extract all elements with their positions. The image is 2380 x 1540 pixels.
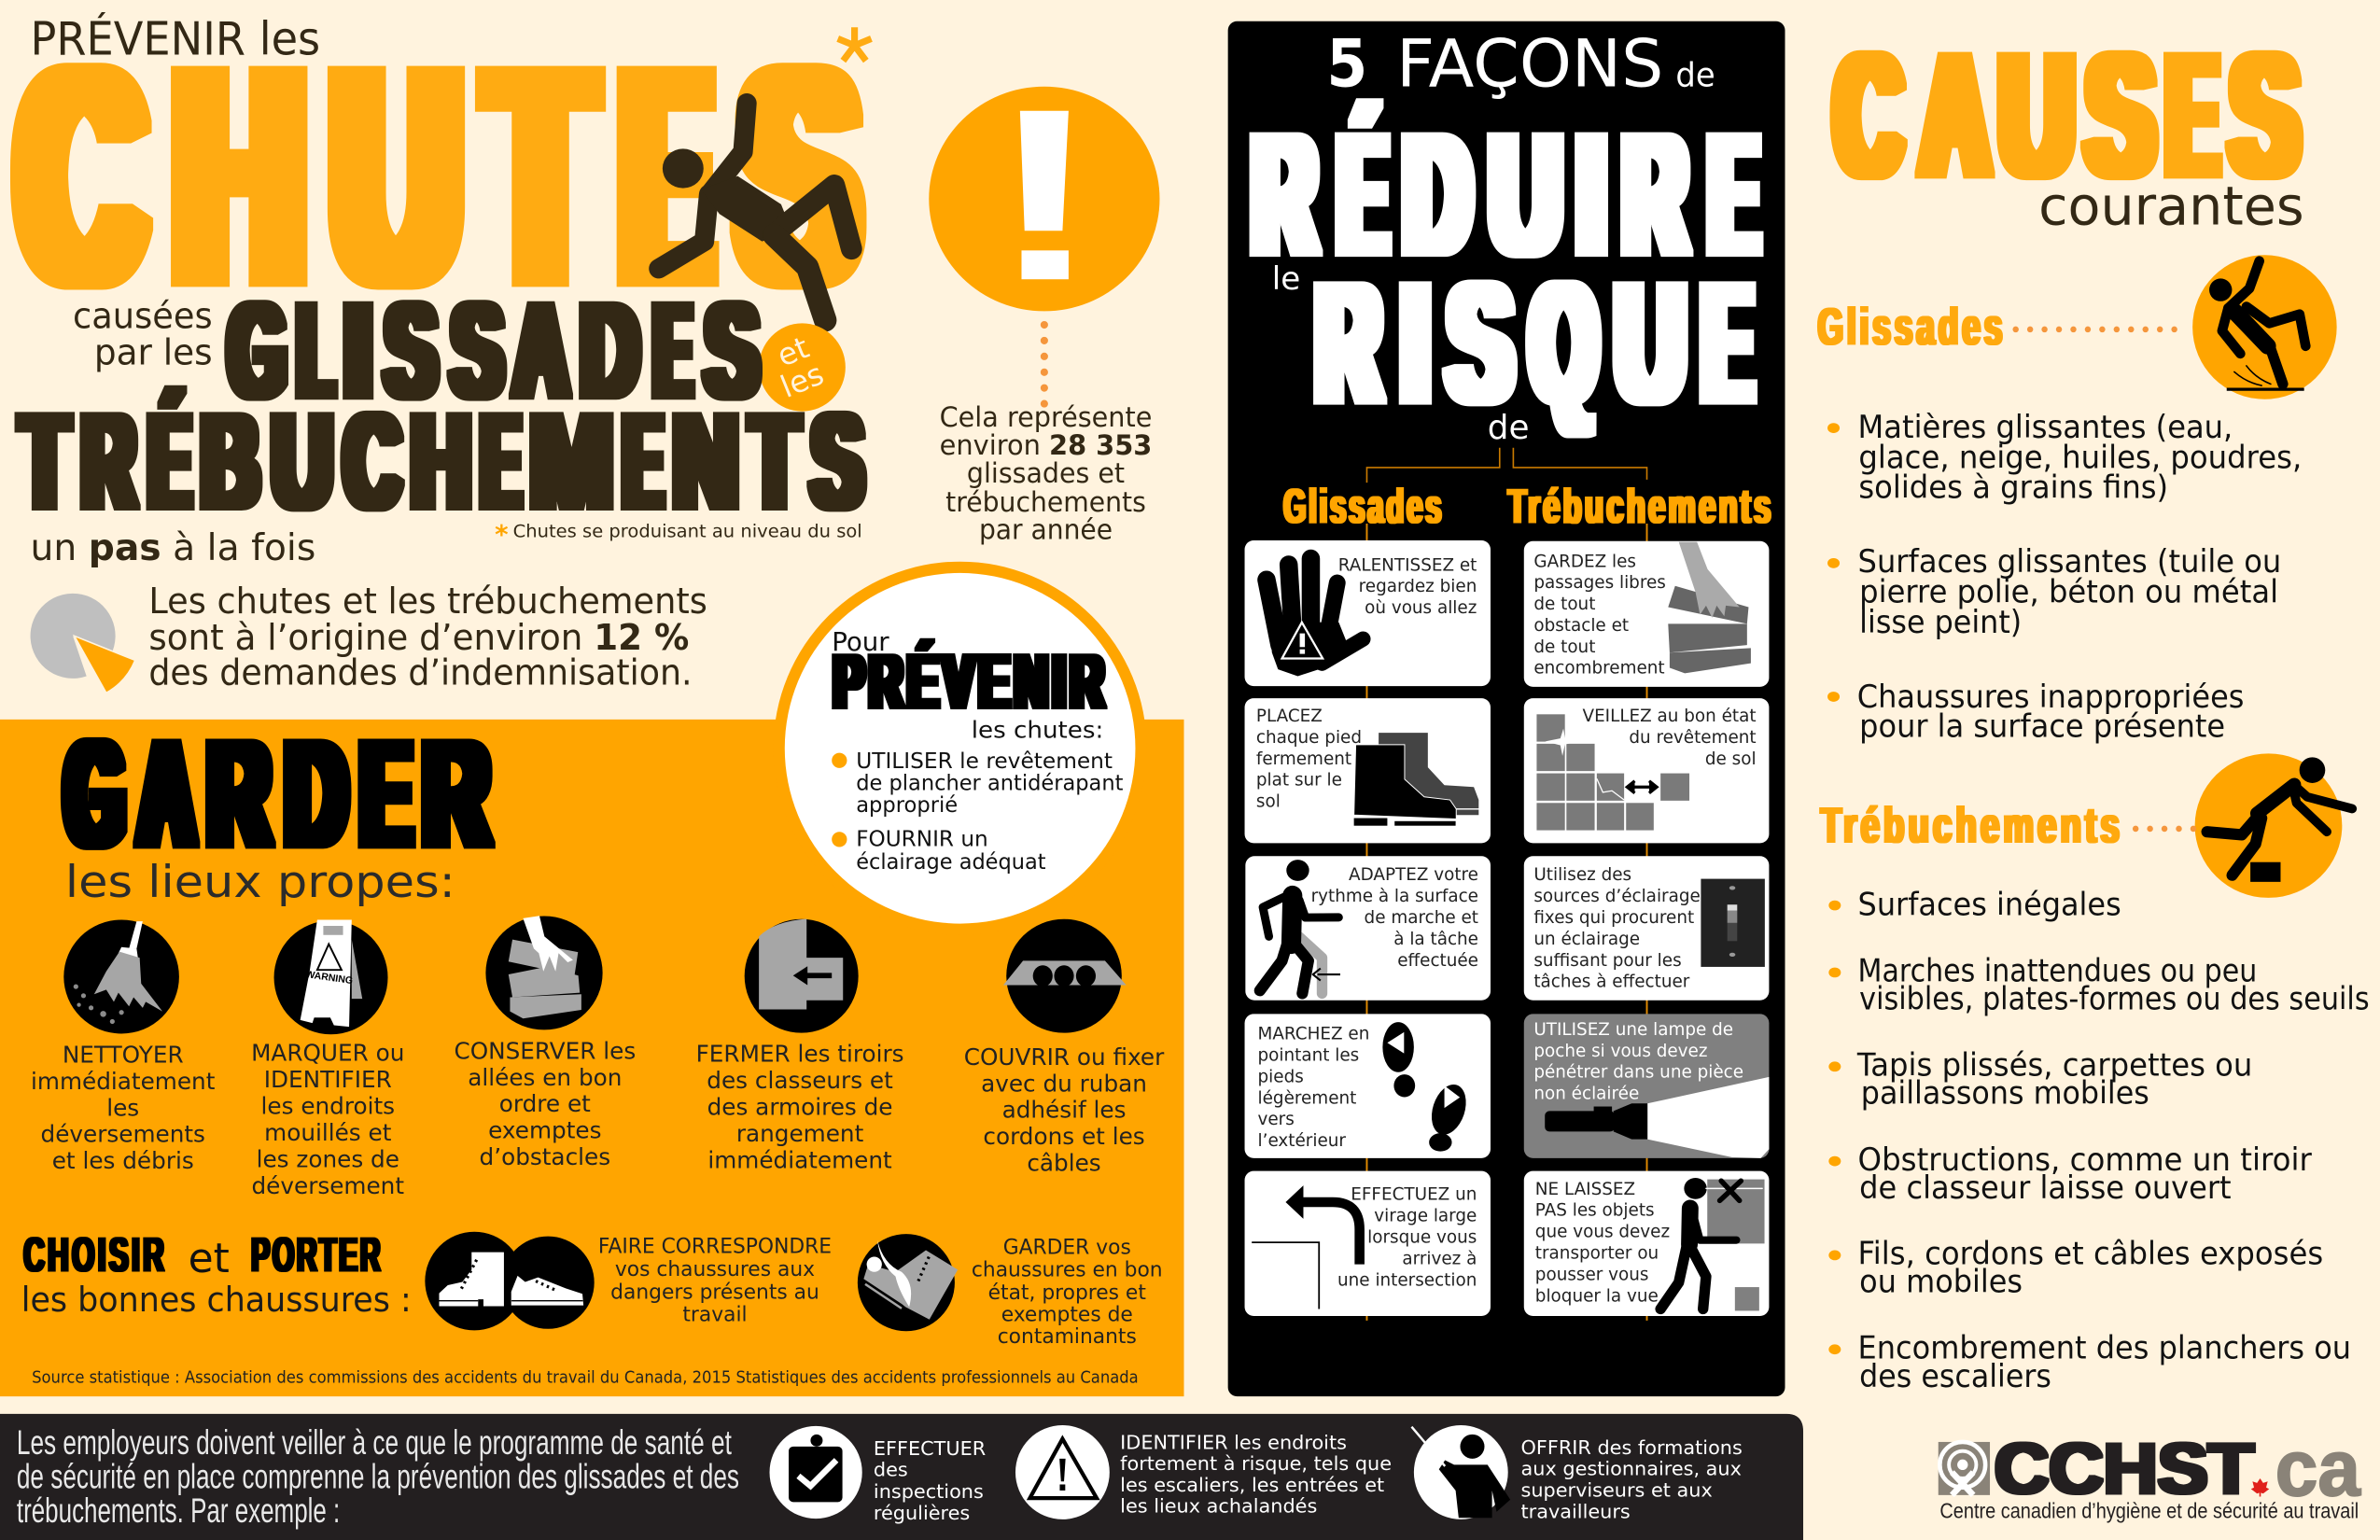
title: trébuchements: T — [751, 385, 798, 537]
title: glissades: G — [229, 274, 286, 426]
title: trébuchements: M — [530, 385, 613, 537]
icon: broom — [63, 920, 179, 1033]
text: offrir: travailleurs — [1521, 1500, 1631, 1522]
card: veillez — [1524, 698, 1769, 843]
text: garder vos chaussures: contaminants — [998, 1325, 1137, 1349]
text: légèrement — [1258, 1088, 1356, 1108]
icon: exclamation circle — [929, 87, 1159, 311]
heading: choisir et porter — [23, 1228, 383, 1282]
text: garder vos chaussures: état, propres et — [988, 1281, 1146, 1305]
text: faire correspondre: vos chaussures aux — [615, 1258, 815, 1281]
title: réduire: I — [1577, 99, 1605, 290]
text: faire correspondre — [598, 1235, 832, 1327]
text: fermer — [696, 1041, 903, 1173]
icon: warning sign: WARNING — [305, 969, 354, 987]
text: un éclairage — [1533, 930, 1640, 949]
chart: pie 12 percent — [31, 594, 135, 693]
title: causes: U — [2000, 18, 2074, 213]
text: 28 353 per year — [940, 401, 1152, 545]
text: le: le — [1272, 260, 1300, 298]
heading: choisir et porter: PORTER — [251, 1228, 383, 1282]
icon: bricks and hand — [1668, 542, 1751, 673]
heading: garder: A — [139, 710, 194, 878]
text: pousser vous — [1535, 1265, 1648, 1284]
text: VEILLEZ au bon état — [1583, 707, 1757, 726]
text: obstacle et — [1533, 616, 1629, 636]
text: ADAPTEZ votre — [1349, 865, 1478, 885]
text: nettoyer: et les débris — [52, 1147, 194, 1174]
text: plat sur le — [1256, 771, 1342, 791]
list: causes trébuchements: ou mobiles — [1859, 1264, 2023, 1300]
title: glissades — [229, 274, 758, 426]
text: marquer: les zones de — [257, 1146, 399, 1173]
title: chutes: S — [741, 7, 857, 345]
title: réduire — [1253, 99, 1757, 290]
subheading: courantes: courantes — [2038, 176, 2304, 238]
text: nettoyer: déversements — [41, 1121, 205, 1148]
text: offrir: OFFRIR des formations — [1521, 1436, 1743, 1459]
text: à la tâche — [1393, 930, 1478, 949]
title: trébuchements — [21, 385, 863, 537]
title: causes: A — [1922, 18, 1988, 213]
title: trébuchements: C — [344, 385, 399, 537]
list: causes trébuchements: Encombrement des planchers ou — [1858, 1330, 2351, 1365]
text: faire correspondre: dangers présents au — [610, 1281, 819, 1304]
list: causes glissades: lisse peint) — [1859, 604, 2022, 640]
text: conserver: ordre et — [499, 1090, 591, 1117]
text: identifier — [1120, 1431, 1392, 1518]
list: causes glissades: pierre polie, béton ou métal — [1859, 574, 2278, 610]
text: Utilisez des — [1533, 865, 1631, 885]
list: causes trébuchements: Tapis plissés, carpettes ou — [1856, 1046, 2252, 1083]
list: causes glissades: Matières glissantes (eau, — [1858, 409, 2233, 445]
text: effectuer: inspections — [874, 1480, 984, 1503]
text: NE LAISSEZ — [1535, 1180, 1635, 1199]
heading: garder: D — [286, 710, 346, 878]
card: ralentissez — [1245, 540, 1491, 686]
text: causées par les — [73, 296, 213, 373]
text — [1337, 1185, 1477, 1290]
text: GARDEZ les — [1533, 552, 1636, 571]
text: marquer — [251, 1040, 404, 1199]
text: où vous allez — [1365, 598, 1477, 618]
panel: five ways: E — [1710, 99, 1757, 290]
footnote: * — [495, 519, 509, 550]
list: causes trébuchements: Surfaces inégales — [1858, 886, 2121, 922]
title: risque: I — [1402, 247, 1429, 438]
badge: et les: et — [772, 329, 814, 374]
title: causes: C — [1835, 18, 1901, 213]
logo domain: ca — [2275, 1423, 2361, 1512]
card: lampe de poche — [1524, 1014, 1769, 1158]
heading: garder: G — [66, 710, 124, 878]
icon: warning sign — [274, 920, 388, 1034]
text: encombrement — [1533, 659, 1665, 679]
text: l’extérieur — [1258, 1131, 1346, 1151]
title: trébuchements: E — [483, 385, 519, 537]
text: un pas à la fois: un pas à la fois — [31, 527, 315, 569]
title: risque: R — [1317, 247, 1379, 438]
text — [1311, 865, 1478, 971]
title: trébuchements: R — [82, 385, 134, 537]
text: MARCHEZ en — [1258, 1025, 1369, 1044]
title: chutes: C — [21, 7, 141, 345]
text: que vous devez — [1535, 1223, 1670, 1242]
text: nettoyer: les — [106, 1094, 139, 1121]
title: glissades: S — [452, 274, 503, 426]
text: identifier: IDENTIFIER les endroits — [1120, 1431, 1347, 1453]
text: chaque pied — [1256, 728, 1362, 748]
text: bloquer la vue — [1535, 1286, 1659, 1306]
icon: walking person — [1260, 860, 1340, 993]
title: trébuchements: É — [149, 385, 189, 537]
icon: tripping person — [2195, 753, 2352, 898]
text: nettoyer: immédiatement — [31, 1068, 216, 1095]
title: glissades: S — [385, 274, 437, 426]
list: causes glissades: glace, neige, huiles, poudres, — [1858, 439, 2302, 475]
icon: boots — [1354, 733, 1480, 826]
subheading: les bonnes chaussures: les bonnes chaussures : — [21, 1280, 412, 1320]
list: causes glissades: pour la surface présente — [1859, 708, 2225, 745]
list: causes trébuchements: Obstructions, comme un tiroir — [1858, 1141, 2312, 1178]
heading: garder: R — [208, 710, 270, 878]
icon: warning triangle — [1015, 1425, 1110, 1519]
text: 28 353 per year: environ 28 353 — [940, 429, 1152, 461]
text: transporter ou — [1535, 1243, 1659, 1263]
text: causées par les: par les — [94, 332, 213, 373]
text: statistic 12 percent: sont à l’origine d’environ 12 % — [148, 618, 689, 659]
icon: stop hand — [1267, 558, 1363, 676]
footer bar — [0, 1414, 1803, 1540]
text: de marche et — [1365, 908, 1478, 928]
text: 28 353 per year: par année — [979, 513, 1113, 545]
text: offrir — [1521, 1436, 1743, 1522]
connector: bracket — [1366, 448, 1647, 483]
list: causes trébuchements: des escaliers — [1859, 1358, 2051, 1394]
title: trébuchements: E — [624, 385, 662, 537]
icon: falling person — [659, 104, 851, 320]
text: sol — [1256, 792, 1281, 812]
text: conserver: exemptes — [488, 1117, 601, 1144]
text: nettoyer: NETTOYER — [63, 1041, 184, 1068]
logo word: CCHST — [1995, 1429, 2254, 1509]
text: 28 353 per year: Cela représente — [940, 401, 1152, 433]
text — [1256, 707, 1362, 812]
title: chutes — [21, 7, 857, 345]
text: pieds — [1258, 1068, 1304, 1087]
text: garder vos chaussures: chaussures en bon — [972, 1259, 1163, 1282]
text: effectuer: régulières — [874, 1502, 970, 1524]
bullet list: de plancher antidérapant — [856, 771, 1124, 795]
text: effectuer: des — [874, 1459, 908, 1481]
text: tâches à effectuer — [1533, 973, 1690, 992]
bullet list: éclairage adéquat — [856, 850, 1046, 875]
text: fixes qui procurent — [1533, 908, 1694, 928]
list: causes trébuchements: Marches inattendues ou peu — [1858, 953, 2257, 989]
title: glissades: L — [299, 274, 332, 426]
heading: 5 façons de: 5 — [1326, 25, 1367, 103]
text: pointant les — [1258, 1046, 1359, 1066]
title: trébuchements: S — [812, 385, 863, 537]
panel: five ways: E — [1703, 247, 1751, 438]
icon: boot and shoe — [425, 1232, 595, 1330]
text — [1533, 865, 1701, 992]
text — [1258, 1025, 1369, 1151]
icon: cable cover — [1003, 919, 1127, 1033]
card: placez — [1245, 698, 1491, 843]
text: couvrir: câbles — [1027, 1150, 1101, 1177]
text: conserver: d’obstacles — [480, 1143, 610, 1170]
text: de tout — [1533, 637, 1595, 657]
text — [1583, 707, 1757, 769]
title: glissades: E — [655, 274, 691, 426]
text: fermer: des armoires de — [707, 1093, 893, 1120]
text: identifier: fortement à risque, tels que — [1120, 1452, 1392, 1475]
text: couvrir: avec du ruban — [981, 1070, 1147, 1097]
title: causes: S — [2087, 18, 2154, 213]
text: fermement — [1256, 749, 1351, 769]
card: marchez — [1245, 1014, 1491, 1158]
text — [1338, 555, 1477, 618]
title: trébuchements: T — [21, 385, 68, 537]
panel: prévenir circle — [774, 562, 1147, 935]
panel: garder orange — [0, 720, 1183, 1396]
icon: trainer — [1411, 1425, 1510, 1519]
text: arrivez à — [1402, 1249, 1477, 1268]
text: employeurs: Les employeurs doivent veiller à ce que le programme de santé et — [17, 1423, 732, 1462]
text: regardez bien — [1359, 577, 1477, 596]
text: non éclairée — [1533, 1084, 1639, 1103]
text: garder vos chaussures — [972, 1236, 1163, 1349]
icon: light switch — [1701, 879, 1765, 967]
text: marquer: déversement — [252, 1172, 404, 1199]
text: fermer: immédiatement — [707, 1146, 892, 1173]
text: effectuée — [1397, 951, 1478, 971]
title: trébuchements: U — [272, 385, 332, 537]
title: trébuchements: B — [202, 385, 259, 537]
text: pour: Pour — [832, 626, 889, 657]
text: de: de — [1488, 409, 1529, 447]
title: causes — [1835, 18, 2299, 213]
text: EFFECTUEZ un — [1351, 1185, 1477, 1205]
text: statistic 12 percent — [148, 581, 707, 693]
heading: garder: E — [361, 710, 411, 878]
text — [1533, 552, 1666, 679]
text: fermer: des classeurs et — [707, 1067, 893, 1094]
list: causes trébuchements: paillassons mobiles — [1861, 1074, 2149, 1111]
text: garder vos chaussures: GARDER vos — [1003, 1236, 1131, 1259]
title: réduire: É — [1339, 99, 1386, 290]
title: réduire: R — [1253, 99, 1315, 290]
title: glissades: D — [581, 274, 638, 426]
text: couvrir: adhésif les — [1002, 1097, 1126, 1124]
footnote: Chutes se produisant au niveau du sol — [513, 523, 862, 542]
title: glissades: S — [706, 274, 758, 426]
icon: slipping person — [2192, 255, 2337, 399]
text: pénétrer dans une pièce — [1533, 1063, 1743, 1083]
icon: turn arrow — [1252, 1185, 1360, 1309]
icon: tiles — [1536, 714, 1689, 831]
text: offrir: aux gestionnaires, aux — [1521, 1458, 1742, 1480]
text: causées par les: causées — [73, 296, 213, 337]
list: causes trébuchements: Fils, cordons et câbles exposés — [1858, 1236, 2323, 1272]
title: trébuchements: H — [412, 385, 470, 537]
subheading: les lieux propes: les lieux propes: — [65, 857, 455, 908]
footnote — [495, 519, 862, 550]
card: sources éclairage — [1524, 856, 1769, 1001]
title: réduire: U — [1491, 99, 1561, 290]
heading: choisir et porter: et — [189, 1235, 230, 1282]
text: 28 353 per year: glissades et — [967, 457, 1125, 489]
text: suffisant pour les — [1533, 951, 1682, 971]
text: lorsque vous — [1367, 1227, 1477, 1247]
logo: cchst — [1939, 1423, 2361, 1522]
text: employeurs — [17, 1423, 739, 1530]
list: causes glissades: Chaussures inappropriées — [1857, 679, 2244, 715]
text: couvrir: COUVRIR ou fixer — [964, 1043, 1165, 1071]
text: une intersection — [1337, 1270, 1477, 1290]
text: statistic 12 percent: des demandes d’indemnisation. — [148, 652, 693, 693]
text: conserver — [454, 1037, 636, 1170]
asterisk — [838, 27, 871, 61]
card: ne laissez pas — [1524, 1171, 1769, 1316]
title: risque: U — [1616, 247, 1685, 438]
text: couvrir: cordons et les — [983, 1123, 1145, 1150]
icon: hand and boxes — [485, 916, 603, 1029]
text: les chutes: les chutes: — [972, 716, 1103, 743]
title: causes: E — [2168, 18, 2217, 213]
text: virage large — [1374, 1207, 1477, 1226]
text: RALENTISSEZ et — [1338, 555, 1477, 575]
text: identifier: les escaliers, les entrées et — [1120, 1474, 1384, 1496]
text: passages libres — [1533, 573, 1666, 593]
card: adaptez — [1245, 856, 1491, 1001]
text: UTILISEZ une lampe de — [1533, 1020, 1733, 1040]
icon: damaged boot — [858, 1234, 958, 1331]
text: identifier: les lieux achalandés — [1120, 1495, 1317, 1518]
badge: et les: les — [776, 357, 829, 405]
badge: et les — [759, 323, 846, 412]
heading: garder: R — [423, 710, 489, 878]
text: conserver: CONSERVER les — [454, 1037, 636, 1064]
heading: 5 façons de: de — [1675, 57, 1715, 95]
bullet list — [832, 749, 1124, 875]
text: employeurs: trébuchements. Par exemple : — [17, 1491, 340, 1530]
list: causes glissades — [1827, 409, 2302, 745]
heading: choisir et porter: CHOISIR — [23, 1228, 167, 1282]
text: fermer: rangement — [736, 1120, 864, 1147]
text — [1535, 1180, 1670, 1306]
icon: flashlight — [1545, 1077, 1769, 1158]
title: réduire: R — [1624, 99, 1686, 290]
text: du revêtement — [1629, 728, 1757, 748]
heading: prévenir: PRÉVENIR — [833, 639, 1109, 725]
text: marquer: MARQUER ou — [251, 1040, 404, 1067]
title: chutes: E — [625, 7, 707, 345]
text: de tout — [1533, 595, 1595, 614]
source note: Source statistique : Association des commissions des accidents du travail du Canada, 2015 Statistiques des accidents professionnels au Canada — [32, 1369, 1139, 1388]
text: vers — [1258, 1110, 1295, 1129]
text: statistic 12 percent: Les chutes et les trébuchements — [148, 581, 707, 623]
heading: trébuchements: Trébuchements — [1508, 481, 1774, 534]
icon: person carrying box — [1660, 1178, 1765, 1310]
title: chutes: U — [334, 7, 458, 345]
list: causes trébuchements: de classeur laisse ouvert — [1859, 1169, 2232, 1206]
text: conserver: allées en bon — [468, 1064, 622, 1091]
title: glissades: A — [514, 274, 567, 426]
connector: dotted line — [1042, 325, 1046, 404]
title: causes: S — [2231, 18, 2299, 213]
heading: prévenir les: PRÉVENIR les — [31, 13, 320, 66]
list: causes glissades: Surfaces glissantes (tuile ou — [1858, 543, 2281, 580]
title: risque: Q — [1531, 247, 1596, 438]
card: gardez — [1524, 541, 1769, 687]
card: effectuez — [1245, 1171, 1491, 1316]
title: réduire: D — [1404, 99, 1471, 290]
icon: drawer — [745, 919, 859, 1033]
text: faire correspondre: FAIRE CORRESPONDRE — [598, 1235, 832, 1258]
list: causes trébuchements — [1828, 886, 2370, 1394]
connector: glissades dots — [2016, 328, 2187, 331]
text — [1533, 1020, 1743, 1103]
text: marquer: mouillés et — [264, 1119, 392, 1146]
title: risque: S — [1449, 247, 1512, 438]
title: chutes: H — [175, 7, 302, 345]
title: chutes: T — [490, 7, 591, 345]
text: poche si vous devez — [1533, 1042, 1707, 1061]
text: effectuer: EFFECTUER — [874, 1437, 986, 1460]
text: couvrir — [964, 1043, 1165, 1177]
heading: glissades right: Glissades — [1817, 298, 2006, 356]
title: trébuchements: N — [673, 385, 738, 537]
text: faire correspondre: travail — [682, 1304, 748, 1327]
text: marquer: les endroits — [261, 1093, 395, 1120]
icon: maple leaf — [2251, 1478, 2269, 1496]
bullet list: FOURNIR un — [856, 828, 988, 852]
text: garder vos chaussures: exemptes de — [1001, 1304, 1133, 1327]
heading: garder — [66, 710, 489, 878]
bullet list: UTILISER le revêtement — [856, 749, 1113, 774]
text: offrir: superviseurs et aux — [1521, 1478, 1713, 1501]
connector: trébuchements dots — [2135, 827, 2195, 831]
text: de sol — [1705, 749, 1757, 769]
text: rythme à la surface — [1311, 887, 1478, 906]
text: PAS les objets — [1535, 1201, 1655, 1221]
logo mark — [1939, 1442, 1990, 1495]
panel: five ways — [1228, 21, 1785, 1396]
column connectors — [1366, 524, 1647, 1321]
heading: 5 façons de — [1326, 25, 1715, 103]
title: glissades: I — [343, 274, 373, 426]
text: nettoyer — [31, 1041, 216, 1174]
bullet list: approprié — [856, 793, 958, 818]
heading: trébuchements right: Trébuchements — [1821, 796, 2123, 853]
text: sources d’éclairage — [1533, 887, 1701, 906]
icon: footprints — [1382, 1022, 1472, 1152]
text: marquer: IDENTIFIER — [264, 1066, 392, 1093]
heading: 5 façons de: FAÇONS — [1396, 25, 1663, 103]
icon: clipboard — [770, 1426, 862, 1519]
text: PLACEZ — [1256, 707, 1323, 726]
title: risque — [1317, 247, 1751, 438]
list: causes glissades: solides à grains fins) — [1858, 469, 2168, 505]
text: employeurs: de sécurité en place comprenne la prévention des glissades et des — [17, 1458, 739, 1496]
heading: glissades: Glissades — [1283, 480, 1444, 534]
text: fermer: FERMER les tiroirs — [696, 1041, 903, 1068]
text: effectuer — [874, 1437, 986, 1524]
text: 28 353 per year: trébuchements — [945, 486, 1146, 518]
